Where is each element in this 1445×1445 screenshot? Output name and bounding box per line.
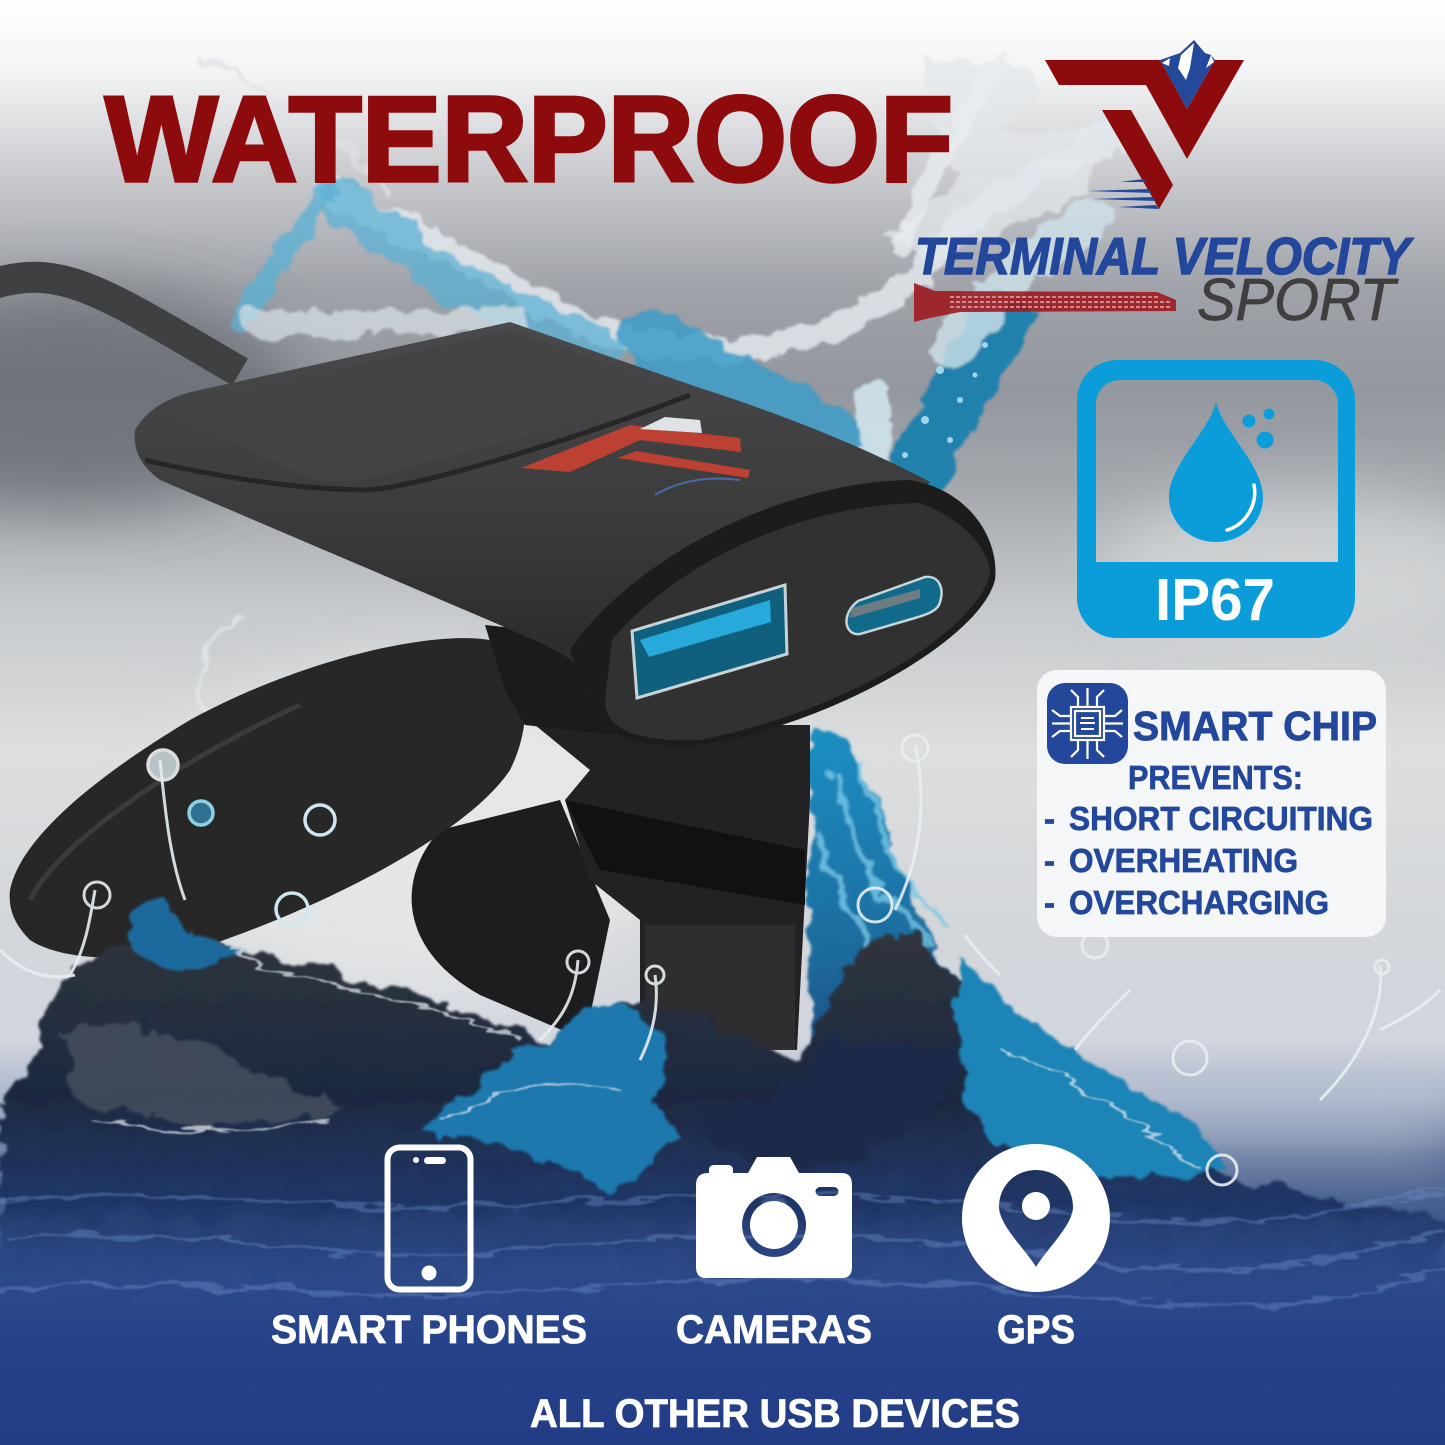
device: smart phones	[271, 1148, 587, 1352]
badge frame	[1077, 360, 1355, 638]
list: OVERCHARGING	[1069, 884, 1329, 921]
background shading	[0, 290, 1445, 1160]
power cable	[0, 277, 240, 372]
logo V mark	[1045, 60, 1244, 159]
device logo	[521, 417, 750, 495]
label: SMART PHONES	[271, 1308, 587, 1352]
brand name	[914, 228, 1414, 333]
device: cameras	[676, 1157, 872, 1352]
hinge	[485, 625, 625, 735]
list: OVERHEATING	[1069, 842, 1298, 879]
device: GPS	[962, 1144, 1110, 1352]
label: CAMERAS	[676, 1308, 872, 1352]
smart chip heading: SMART CHIP	[1133, 703, 1377, 749]
list: -	[1044, 842, 1055, 879]
dark wave	[0, 930, 1445, 1300]
icon: phone	[388, 1148, 470, 1290]
icon: camera	[696, 1157, 852, 1278]
panel: smart chip	[1037, 670, 1386, 937]
list: -	[1044, 884, 1055, 921]
icon: water drop	[1169, 402, 1274, 542]
product: USB charger	[0, 277, 996, 1050]
drops on cap	[148, 750, 335, 925]
device body	[135, 322, 930, 742]
rear blue wave behind the mount	[810, 725, 1000, 1120]
bottom water surface texture	[0, 1190, 1445, 1307]
foreground water splash	[0, 735, 1445, 1300]
USB-A port	[632, 585, 787, 698]
title: WATERPROOF	[105, 71, 953, 207]
logo speed lines	[1087, 179, 1159, 209]
water foam streaks	[90, 950, 1200, 1170]
clamp ring behind	[412, 800, 610, 1040]
panel background	[1037, 670, 1386, 937]
background water splash	[200, 60, 1130, 740]
terminal velocity wordmark: TERMINAL VELOCITY	[915, 228, 1414, 286]
sport wordmark: SPORT	[1197, 267, 1399, 333]
list: SHORT CIRCUITING	[1069, 800, 1373, 837]
droplets	[0, 735, 1440, 1185]
logo T stem	[1102, 110, 1173, 209]
spray dots	[902, 342, 988, 458]
protective cap flap	[10, 638, 525, 958]
USB-C port	[846, 577, 941, 634]
logo mountain	[1160, 40, 1215, 109]
tire track	[914, 283, 1176, 322]
device front face	[570, 480, 996, 746]
mount column	[535, 725, 810, 1050]
list	[1044, 800, 1373, 921]
badge label: IP67	[1155, 567, 1275, 633]
footer text: ALL OTHER USB DEVICES	[530, 1392, 1020, 1436]
icon: map pin	[962, 1144, 1110, 1292]
icon: chip	[1047, 683, 1128, 764]
brand logo	[1045, 40, 1244, 209]
label: GPS	[997, 1308, 1075, 1352]
blue washes	[60, 890, 1225, 1190]
prevents label: PREVENTS:	[1128, 759, 1303, 796]
list: -	[1044, 800, 1055, 837]
IP67 badge	[1077, 360, 1355, 638]
